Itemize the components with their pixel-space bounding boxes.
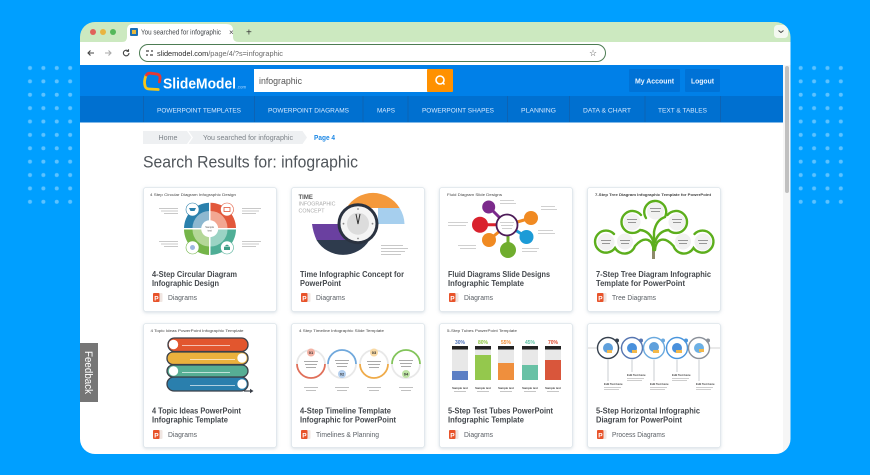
card title: 7-Step Tree Diagram Infographic — [596, 270, 712, 279]
card: 5-step horizontal — [588, 324, 720, 448]
dot pattern right — [794, 61, 848, 208]
card title: 4 Topic Ideas PowerPoint — [152, 406, 241, 416]
thumbnail: horizontal process: Edit Text Here — [604, 382, 623, 386]
card title: Infographic Template — [152, 416, 229, 424]
thumbnail: clock diagram: TIME — [298, 195, 313, 201]
card title: Infographic for PowerPoint — [300, 416, 396, 424]
navigation menu: DATA & CHART — [583, 107, 631, 114]
tab menu button — [774, 25, 788, 38]
thumbnail: test tube chart: 5-Step Tubes PowerPoint Template — [447, 329, 517, 333]
logout button: Logout — [691, 76, 715, 85]
powerpoint icon: P — [598, 432, 603, 439]
thumbnail: test tube chart: 55% — [501, 340, 512, 346]
new tab button: + — [246, 28, 252, 38]
active tab: × — [229, 28, 234, 37]
navigation menu: POWERPOINT SHAPES — [422, 107, 494, 114]
card title: Template for PowerPoint — [596, 279, 685, 288]
card category: Diagrams — [464, 431, 493, 439]
breadcrumb: Home — [158, 135, 178, 142]
dot pattern left — [23, 61, 77, 208]
site header — [80, 65, 783, 96]
breadcrumb — [143, 131, 335, 144]
card: 5-step test tubes — [440, 324, 572, 448]
logo — [145, 73, 247, 92]
thumbnail: timeline rings: 01 — [309, 350, 314, 355]
thumbnail: timeline rings: 4 Step Timeline Infographic Slide Template — [299, 329, 384, 333]
navigation menu: POWERPOINT DIAGRAMS — [268, 107, 349, 114]
thumbnail: test tube chart: 70% — [548, 340, 559, 346]
thumbnail: fluid diagram: Fluid Diagram Slide Designs — [447, 193, 502, 197]
card title: PowerPoint — [300, 279, 341, 288]
card: tree diagram — [588, 188, 720, 312]
thumbnail: horizontal process: Edit Text Here — [627, 373, 646, 377]
feedback tab: Feedback — [82, 351, 94, 394]
address bar — [140, 44, 606, 62]
powerpoint icon: P — [302, 295, 307, 302]
card category: Tree Diagrams — [612, 294, 656, 302]
card title — [152, 270, 237, 288]
thumbnail: circular diagram: 4 Step Circular Diagram Infographic Design — [150, 193, 236, 197]
active tab: You searched for infographic — [141, 30, 221, 37]
my account button: My Account — [635, 76, 675, 85]
navigation menu: POWERPOINT TEMPLATES — [157, 107, 241, 114]
powerpoint icon: P — [154, 295, 159, 302]
thumbnail: clock diagram: CONCEPT — [298, 208, 325, 214]
breadcrumb: You searched for infographic — [203, 135, 294, 142]
thumbnail: stacked bands: 4 Topic Ideas PowerPoint Infographic Template — [150, 329, 244, 333]
card title: Diagram for PowerPoint — [596, 416, 682, 424]
card title — [596, 270, 712, 288]
powerpoint icon: P — [450, 295, 455, 302]
thumbnail: timeline rings: 04 — [404, 372, 409, 376]
thumbnail: test tube chart: Sample text — [452, 386, 468, 390]
card title: 4-Step Circular Diagram — [152, 270, 237, 279]
breadcrumb: Page 4 — [314, 135, 335, 142]
card: 4-step circular diagram — [144, 188, 276, 312]
feedback tab — [80, 343, 98, 402]
search field: infographic — [259, 76, 302, 86]
thumbnail: horizontal process: Edit Text Here — [672, 373, 691, 377]
card title: Fluid Diagrams Slide Designs — [448, 270, 551, 279]
card: 4 topic ideas — [144, 324, 276, 448]
browser tab strip — [80, 22, 791, 42]
thumbnail: test tube chart: Sample text — [522, 386, 538, 390]
active tab — [122, 24, 239, 42]
thumbnail: test tube chart: Sample text — [475, 386, 491, 390]
search field — [254, 69, 428, 92]
thumbnail: clock diagram: INFOGRAPHIC — [298, 202, 336, 208]
thumbnail: circular diagram: text — [208, 228, 212, 232]
thumbnail: test tube chart: 45% — [525, 340, 536, 346]
thumbnail: horizontal process: Edit Text Here — [696, 382, 715, 386]
thumbnail: timeline rings: 03 — [372, 350, 377, 355]
card: time infographic — [292, 188, 424, 312]
card category: Diagrams — [464, 294, 493, 302]
card: 4-step timeline — [292, 324, 424, 448]
thumbnail: timeline rings — [297, 329, 420, 391]
navigation menu: MAPS — [377, 107, 395, 114]
thumbnail: clock diagram — [298, 193, 408, 255]
logout button — [685, 69, 720, 92]
thumbnail: test tube chart: 80% — [478, 340, 489, 346]
card title: 5-Step Horizontal Infographic — [596, 406, 701, 416]
thumbnail: test tube chart: Sample text — [498, 386, 514, 390]
powerpoint icon: P — [598, 295, 603, 302]
thumbnail: tree diagram: 7-Step Tree Diagram Infographic Template for PowerPoint — [595, 193, 712, 197]
search button — [427, 69, 453, 92]
navigation buttons — [88, 49, 129, 56]
window control lights — [90, 29, 116, 35]
logo: .com — [236, 84, 247, 90]
browser window — [80, 22, 791, 455]
thumbnail: test tube chart — [447, 329, 561, 392]
card title: Infographic Template — [448, 279, 525, 288]
navigation menu — [80, 96, 783, 122]
card title — [448, 406, 553, 424]
thumbnail: horizontal process — [588, 338, 720, 390]
card title — [596, 406, 701, 424]
page heading: Search Results for: infographic — [143, 154, 358, 172]
card category: Diagrams — [316, 294, 345, 302]
navigation menu: PLANNING — [521, 107, 556, 114]
browser toolbar — [87, 44, 606, 62]
card category: Diagrams — [168, 294, 197, 302]
card title: Infographic Design — [152, 279, 219, 288]
card category: Timelines & Planning — [316, 431, 379, 439]
card category: Process Diagrams — [612, 431, 665, 439]
powerpoint icon: P — [302, 432, 307, 439]
thumbnail: test tube chart: 30% — [455, 340, 466, 346]
card title — [448, 270, 551, 288]
powerpoint icon: P — [450, 432, 455, 439]
card title: 4-Step Timeline Template — [300, 406, 392, 416]
scrollbar — [783, 65, 791, 455]
thumbnail: test tube chart: Sample text — [545, 386, 561, 390]
thumbnail: circular diagram: Sample — [205, 225, 215, 229]
powerpoint icon: P — [154, 432, 159, 439]
card category: Diagrams — [168, 431, 197, 439]
address bar: ☆ — [589, 48, 597, 58]
card title — [152, 406, 241, 424]
my account button — [629, 69, 680, 92]
card title — [300, 406, 396, 424]
card title: Infographic Template — [448, 416, 525, 424]
thumbnail: horizontal process: Edit Text Here — [650, 382, 669, 386]
thumbnail: circular diagram — [150, 193, 261, 255]
address bar: slidemodel.com/page/4/?s=infographic — [157, 49, 283, 58]
card title: 5-Step Test Tubes PowerPoint — [448, 406, 553, 416]
card title — [300, 271, 404, 286]
card: fluid diagrams — [440, 188, 572, 312]
thumbnail: timeline rings: 02 — [340, 372, 345, 376]
navigation menu: TEXT & TABLES — [658, 107, 707, 114]
logo: SlideModel — [163, 76, 236, 92]
card title: Time Infographic Concept for — [300, 270, 404, 279]
